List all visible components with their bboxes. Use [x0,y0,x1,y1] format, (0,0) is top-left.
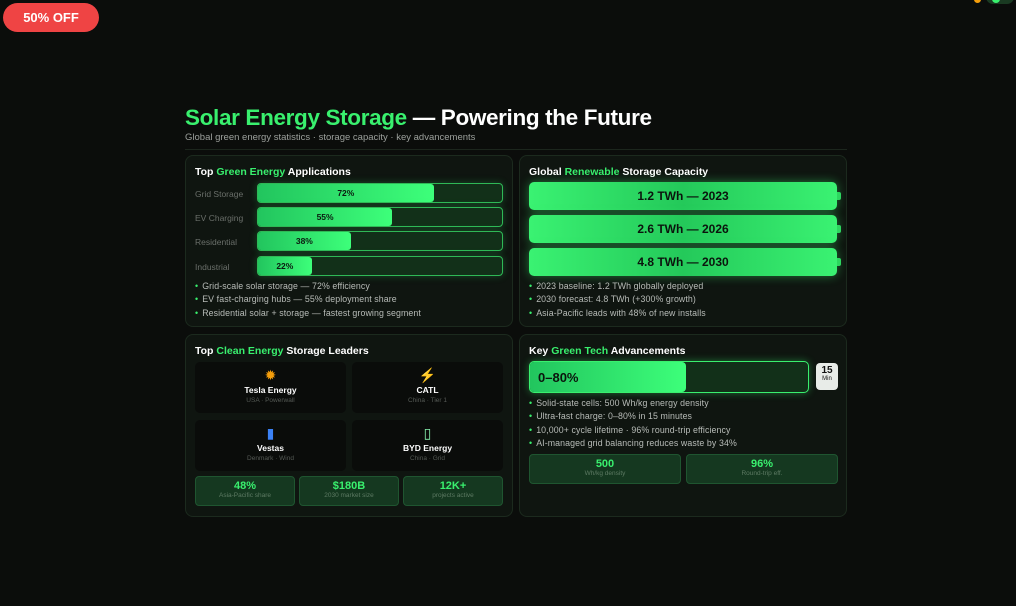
battery bars [522,176,844,282]
bar chart: 22% [276,261,293,271]
stats: 48% [234,480,256,492]
charge bar: 0–80% [538,370,578,384]
heading: Key Green Tech Advancements [529,345,685,357]
battery bars: 4.8 TWh — 2030 [637,255,729,269]
bullets: Grid-scale solar storage — 72% efficiency [202,281,370,291]
card: byd [352,420,503,471]
card: tesla: Tesla Energy [244,385,297,395]
panel: leaders [185,334,513,517]
badge: 15 min: Min [822,376,832,382]
bullets [529,398,737,448]
card: catl [352,362,503,413]
stats: 12K+ [440,480,466,492]
charge bar [529,361,809,393]
bar chart: Grid Storage [195,189,243,199]
bar chart: 38% [296,236,313,246]
bullets [529,281,706,318]
panel: storage capacity [519,155,847,327]
battery bars: 1.2 TWh — 2023 [637,189,729,203]
stats: Round-trip eff. [741,470,783,477]
subtitle: Global green energy statistics · storage capacity · key advancements [185,132,475,143]
heading: Global Renewable Storage Capacity [529,166,708,178]
bar chart: 55% [317,212,334,222]
title: Solar Energy Storage — Powering the Future [185,105,652,130]
badge: 15 min [816,363,838,390]
stats [529,454,838,484]
badge: 50% off: 50% OFF [23,10,79,25]
card: catl: China · Tier 1 [408,397,447,404]
stats: 96% [751,458,773,470]
card: vestas [195,420,346,471]
badge: 15 min: 15 [821,365,833,376]
card: tesla: ✹ [265,367,276,383]
bullets: AI-managed grid balancing reduces waste by 34% [536,438,737,448]
stats: Wh/kg density [585,470,625,477]
card: tesla [195,362,346,413]
heading: Top Green Energy Applications [195,166,351,178]
bar chart [195,179,506,280]
bullets: Ultra-fast charge: 0–80% in 15 minutes [536,411,692,421]
bullets: Solid-state cells: 500 Wh/kg energy density [536,398,709,408]
stats: $180B [333,480,365,492]
bullets: EV fast-charging hubs — 55% deployment share [202,294,397,304]
battery bars: 2.6 TWh — 2026 [637,222,729,236]
card: vestas: Vestas [257,443,284,453]
card: vestas: Denmark · Wind [247,455,294,462]
stats: Asia-Pacific share [219,492,271,499]
card: byd: BYD Energy [403,443,452,453]
icon: status dots [974,0,1014,4]
stats: projects active [432,492,474,499]
panel: applications [185,155,513,327]
bar chart: EV Charging [195,213,243,223]
bullets: Residential solar + storage — fastest growing segment [202,308,421,318]
bullets: 10,000+ cycle lifetime · 96% round-trip efficiency [536,425,730,435]
card: catl: ⚡ [419,367,436,383]
card: byd: ▯ [424,425,431,441]
stats: 2030 market size [324,492,374,499]
stats [195,476,503,506]
card: catl: CATL [416,385,439,395]
badge: 50% off [3,3,99,32]
bar chart: Industrial [195,262,230,272]
bar chart: Residential [195,237,237,247]
panel: advancements [519,334,847,517]
card: byd: China · Grid [410,455,445,462]
card: tesla: USA · Powerwall [246,397,295,404]
bullets [195,281,421,318]
bullets: 2023 baseline: 1.2 TWh globally deployed [536,281,703,291]
bullets: Asia-Pacific leads with 48% of new installs [536,308,706,318]
bullets: 2030 forecast: 4.8 TWh (+300% growth) [536,294,696,304]
card: vestas: ▮ [267,425,274,441]
bar chart: 72% [337,188,354,198]
heading: Top Clean Energy Storage Leaders [195,345,369,357]
stats: 500 [596,458,614,470]
